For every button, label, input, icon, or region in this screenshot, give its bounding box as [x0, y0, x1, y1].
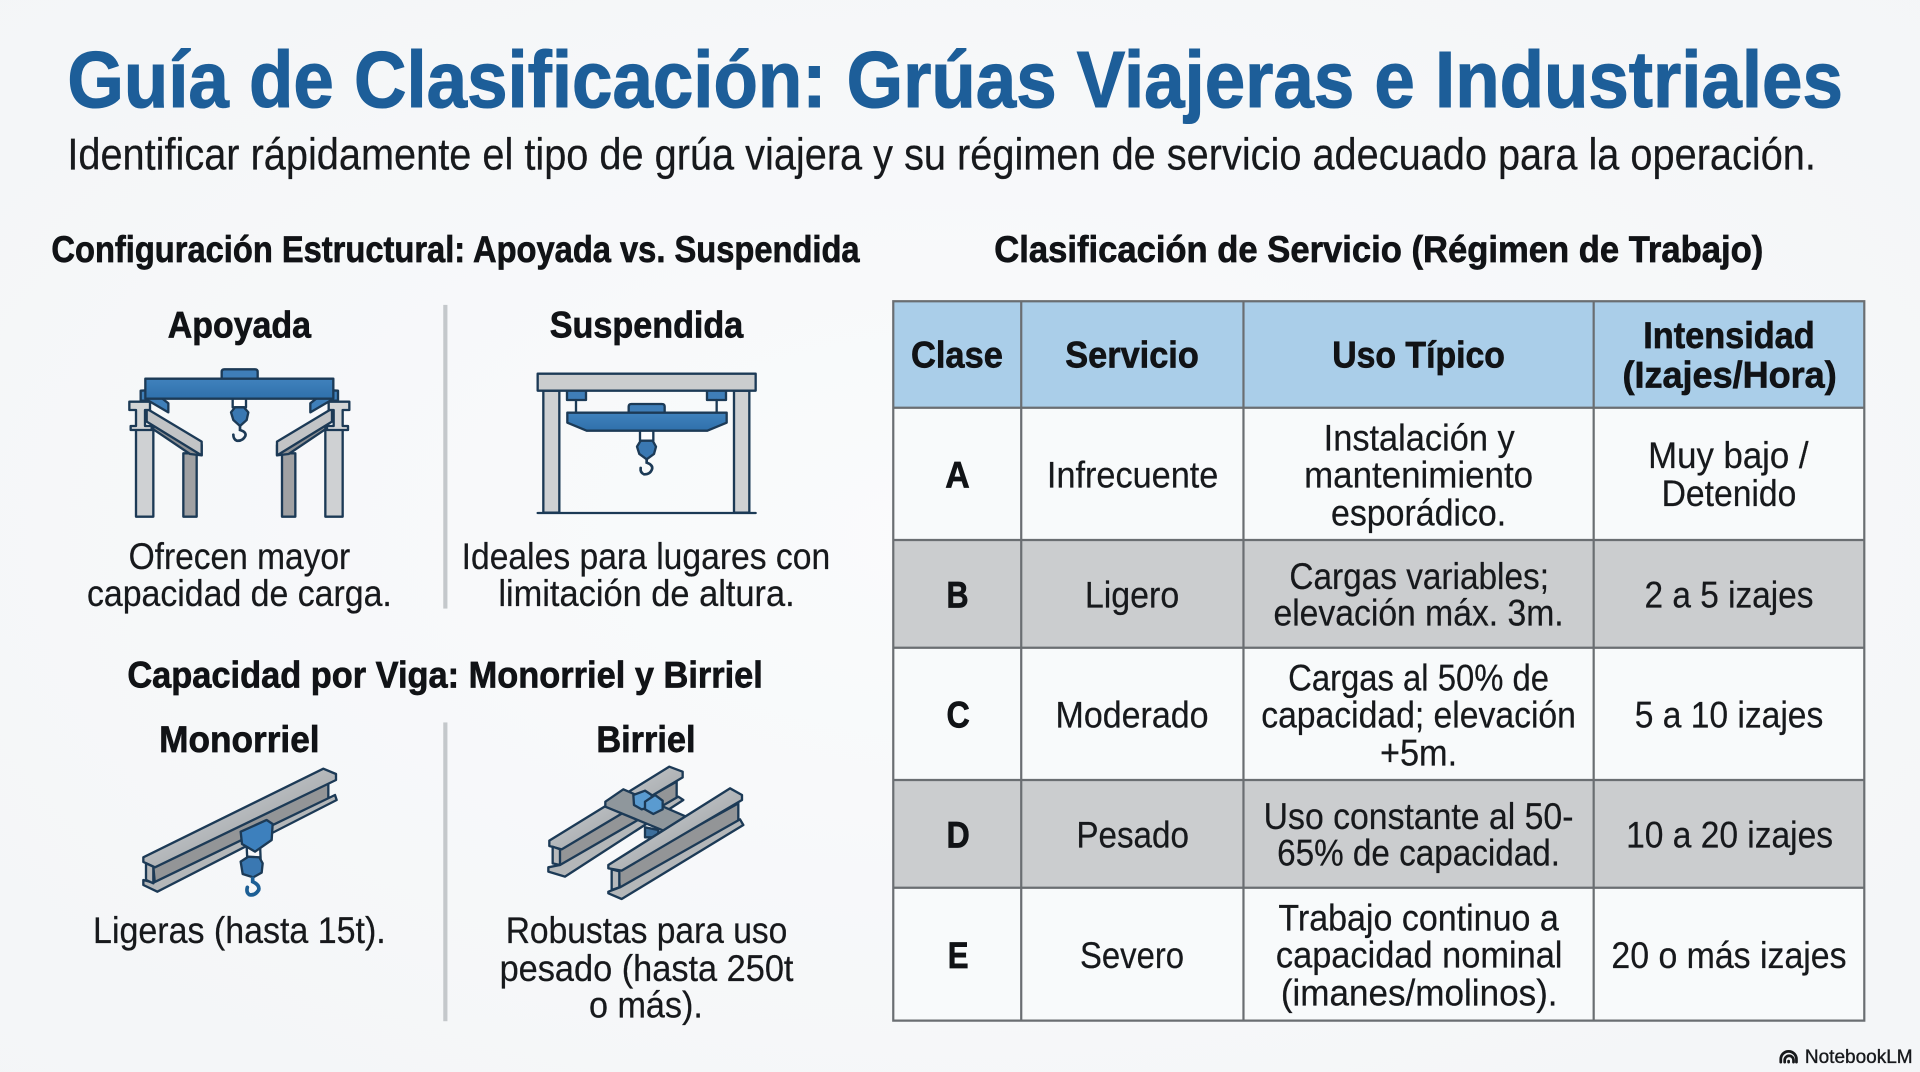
- divider line: apoyada / suspendida: [443, 305, 447, 609]
- caption: suspendida: limitación de altura.: [498, 572, 795, 614]
- table header row: Intensidad: [1643, 314, 1815, 356]
- row D: D: [947, 813, 970, 855]
- table header row: [893, 301, 1864, 408]
- caption: birriel: Robustas para uso: [506, 909, 787, 951]
- row A: Muy bajo /: [1648, 434, 1809, 476]
- row C: Cargas al 50% de: [1288, 657, 1549, 699]
- table: service classes: [893, 301, 1864, 1021]
- heading: capacidad por viga: Capacidad por Viga: Monorriel y Birriel: [127, 653, 763, 695]
- row A: mantenimiento: [1304, 453, 1533, 495]
- row C: Moderado: [1056, 694, 1209, 736]
- icon: suspendida crane: [538, 374, 756, 513]
- row C: +5m.: [1380, 731, 1457, 773]
- caption: birriel: pesado (hasta 250t: [500, 947, 794, 989]
- row B: B: [947, 573, 969, 615]
- caption: apoyada: capacidad de carga.: [87, 572, 392, 614]
- caption: apoyada: [87, 535, 392, 614]
- heading: birriel: Birriel: [596, 718, 696, 760]
- row E: Severo: [1080, 934, 1184, 976]
- heading: suspendida: Suspendida: [550, 303, 743, 345]
- row A: Detenido: [1662, 472, 1796, 514]
- row B: [893, 540, 1864, 648]
- divider line: monorriel / birriel: [443, 722, 447, 1021]
- row B: elevación máx. 3m.: [1273, 592, 1564, 634]
- row A: Instalación y: [1324, 417, 1515, 459]
- row E: E: [948, 934, 969, 976]
- panel: suspendida: [462, 303, 830, 614]
- row B: Cargas variables;: [1289, 555, 1549, 597]
- row E: capacidad nominal: [1276, 933, 1562, 975]
- row E: (imanes/molinos).: [1281, 971, 1558, 1013]
- row E: 20 o más izajes: [1611, 934, 1847, 976]
- heading: configuración estructural: Configuración Estructural: Apoyada vs. Suspendida: [51, 228, 860, 270]
- row C: capacidad; elevación: [1261, 693, 1576, 735]
- row A: A: [945, 454, 970, 496]
- panel: birriel: [500, 718, 794, 1026]
- table header row: Servicio: [1065, 334, 1199, 376]
- heading: monorriel: Monorriel: [159, 718, 320, 760]
- caption: apoyada: Ofrecen mayor: [129, 535, 350, 577]
- heading: clasificación de servicio: Clasificación de Servicio (Régimen de Trabajo): [994, 228, 1763, 270]
- caption: suspendida: Ideales para lugares con: [462, 535, 830, 577]
- icon: birriel double beam with trolley: [548, 767, 743, 899]
- row E: [893, 888, 1864, 1020]
- row D: Pesado: [1076, 813, 1189, 855]
- caption: birriel: [500, 909, 794, 1026]
- row A: esporádico.: [1331, 491, 1506, 533]
- row C: 5 a 10 izajes: [1635, 694, 1823, 736]
- row B: Ligero: [1085, 573, 1179, 615]
- row D: 10 a 20 izajes: [1626, 813, 1833, 855]
- watermark: NotebookLM: NotebookLM: [1805, 1046, 1913, 1068]
- caption: monorriel: Ligeras (hasta 15t).: [93, 909, 386, 951]
- panel: apoyada: [87, 303, 392, 614]
- row E: Trabajo continuo a: [1278, 897, 1559, 939]
- icon: apoyada crane: [129, 369, 349, 517]
- table header row: Clase: [911, 334, 1003, 376]
- heading: apoyada: Apoyada: [168, 303, 311, 345]
- row D: 65% de capacidad.: [1277, 832, 1560, 874]
- row B: 2 a 5 izajes: [1644, 573, 1813, 615]
- row C: [893, 648, 1864, 780]
- table header row: Uso Típico: [1332, 334, 1505, 376]
- row D: Uso constante al 50-: [1264, 795, 1573, 837]
- row D: [893, 780, 1864, 888]
- icon: monorriel beam with hoist: [143, 769, 337, 895]
- panel: monorriel: [93, 718, 386, 951]
- row C: C: [947, 694, 970, 736]
- row A: Infrecuente: [1047, 454, 1218, 496]
- caption: suspendida: [462, 535, 830, 614]
- row A: [893, 408, 1864, 540]
- caption: birriel: o más).: [589, 984, 703, 1026]
- table header row: (Izajes/Hora): [1622, 354, 1837, 396]
